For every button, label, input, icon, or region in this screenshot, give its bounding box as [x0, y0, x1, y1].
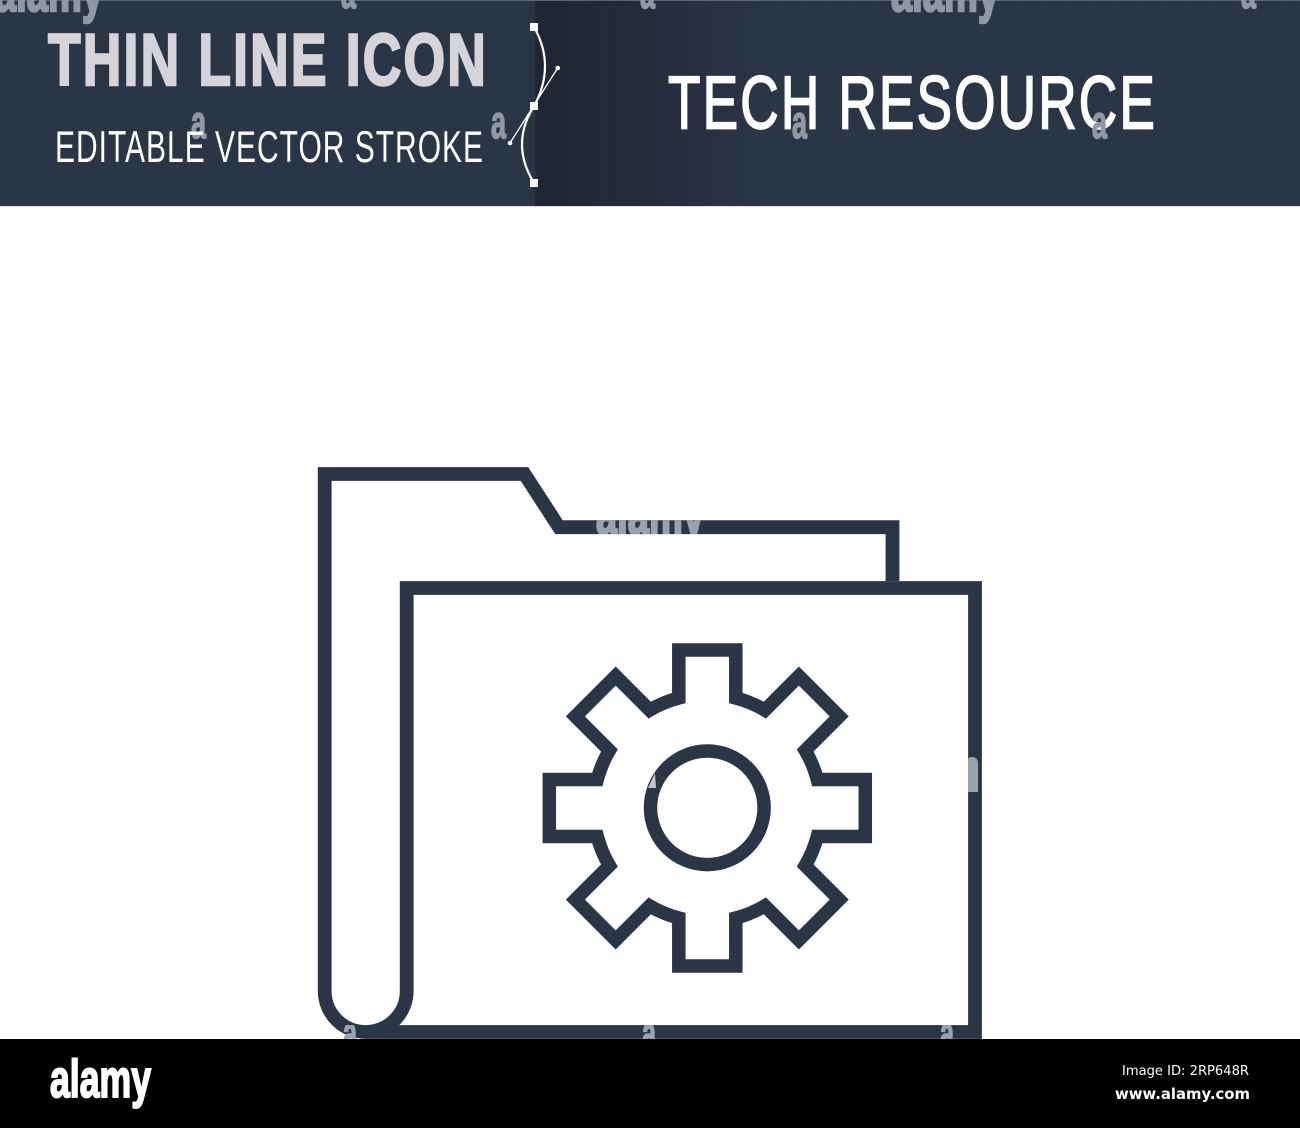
text: image id: Image ID: 2RP648R — [1122, 1063, 1249, 1079]
gear outline — [549, 650, 865, 966]
watermark: fragments over icon strokes: a — [642, 1007, 656, 1059]
watermark: header fragments over text — [792, 96, 1107, 148]
watermark: fragments over icon strokes: a — [940, 1007, 954, 1059]
subheading: editable vector stroke: EDITABLE VECTOR STROKE — [55, 123, 484, 172]
text: website: www.alamy.com — [1115, 1085, 1250, 1103]
watermark: fragments over icon strokes: a — [343, 1007, 357, 1059]
watermark: fragments over icon strokes: alamy — [596, 483, 704, 547]
watermark: header fragments behind text — [0, 0, 1256, 148]
folder outline — [325, 474, 975, 1032]
icon: bezier curve handles — [508, 23, 560, 187]
watermark: header fragments behind text: a — [191, 96, 206, 148]
heading: thin line icon: THIN LINE ICON — [48, 20, 488, 101]
watermark: fragments over icon strokes — [344, 520, 978, 1039]
watermark: header fragments behind text: a — [491, 96, 506, 148]
panel: footer bar — [0, 1039, 1300, 1128]
watermark: header fragments over text: a — [1092, 96, 1107, 148]
logo: alamy: alamy — [50, 1050, 151, 1109]
icon: folder with gear — [325, 474, 975, 1032]
gear hub circle — [650, 751, 764, 865]
panel: header banner — [0, 0, 1300, 207]
watermark: header fragments over text: a — [792, 96, 807, 148]
